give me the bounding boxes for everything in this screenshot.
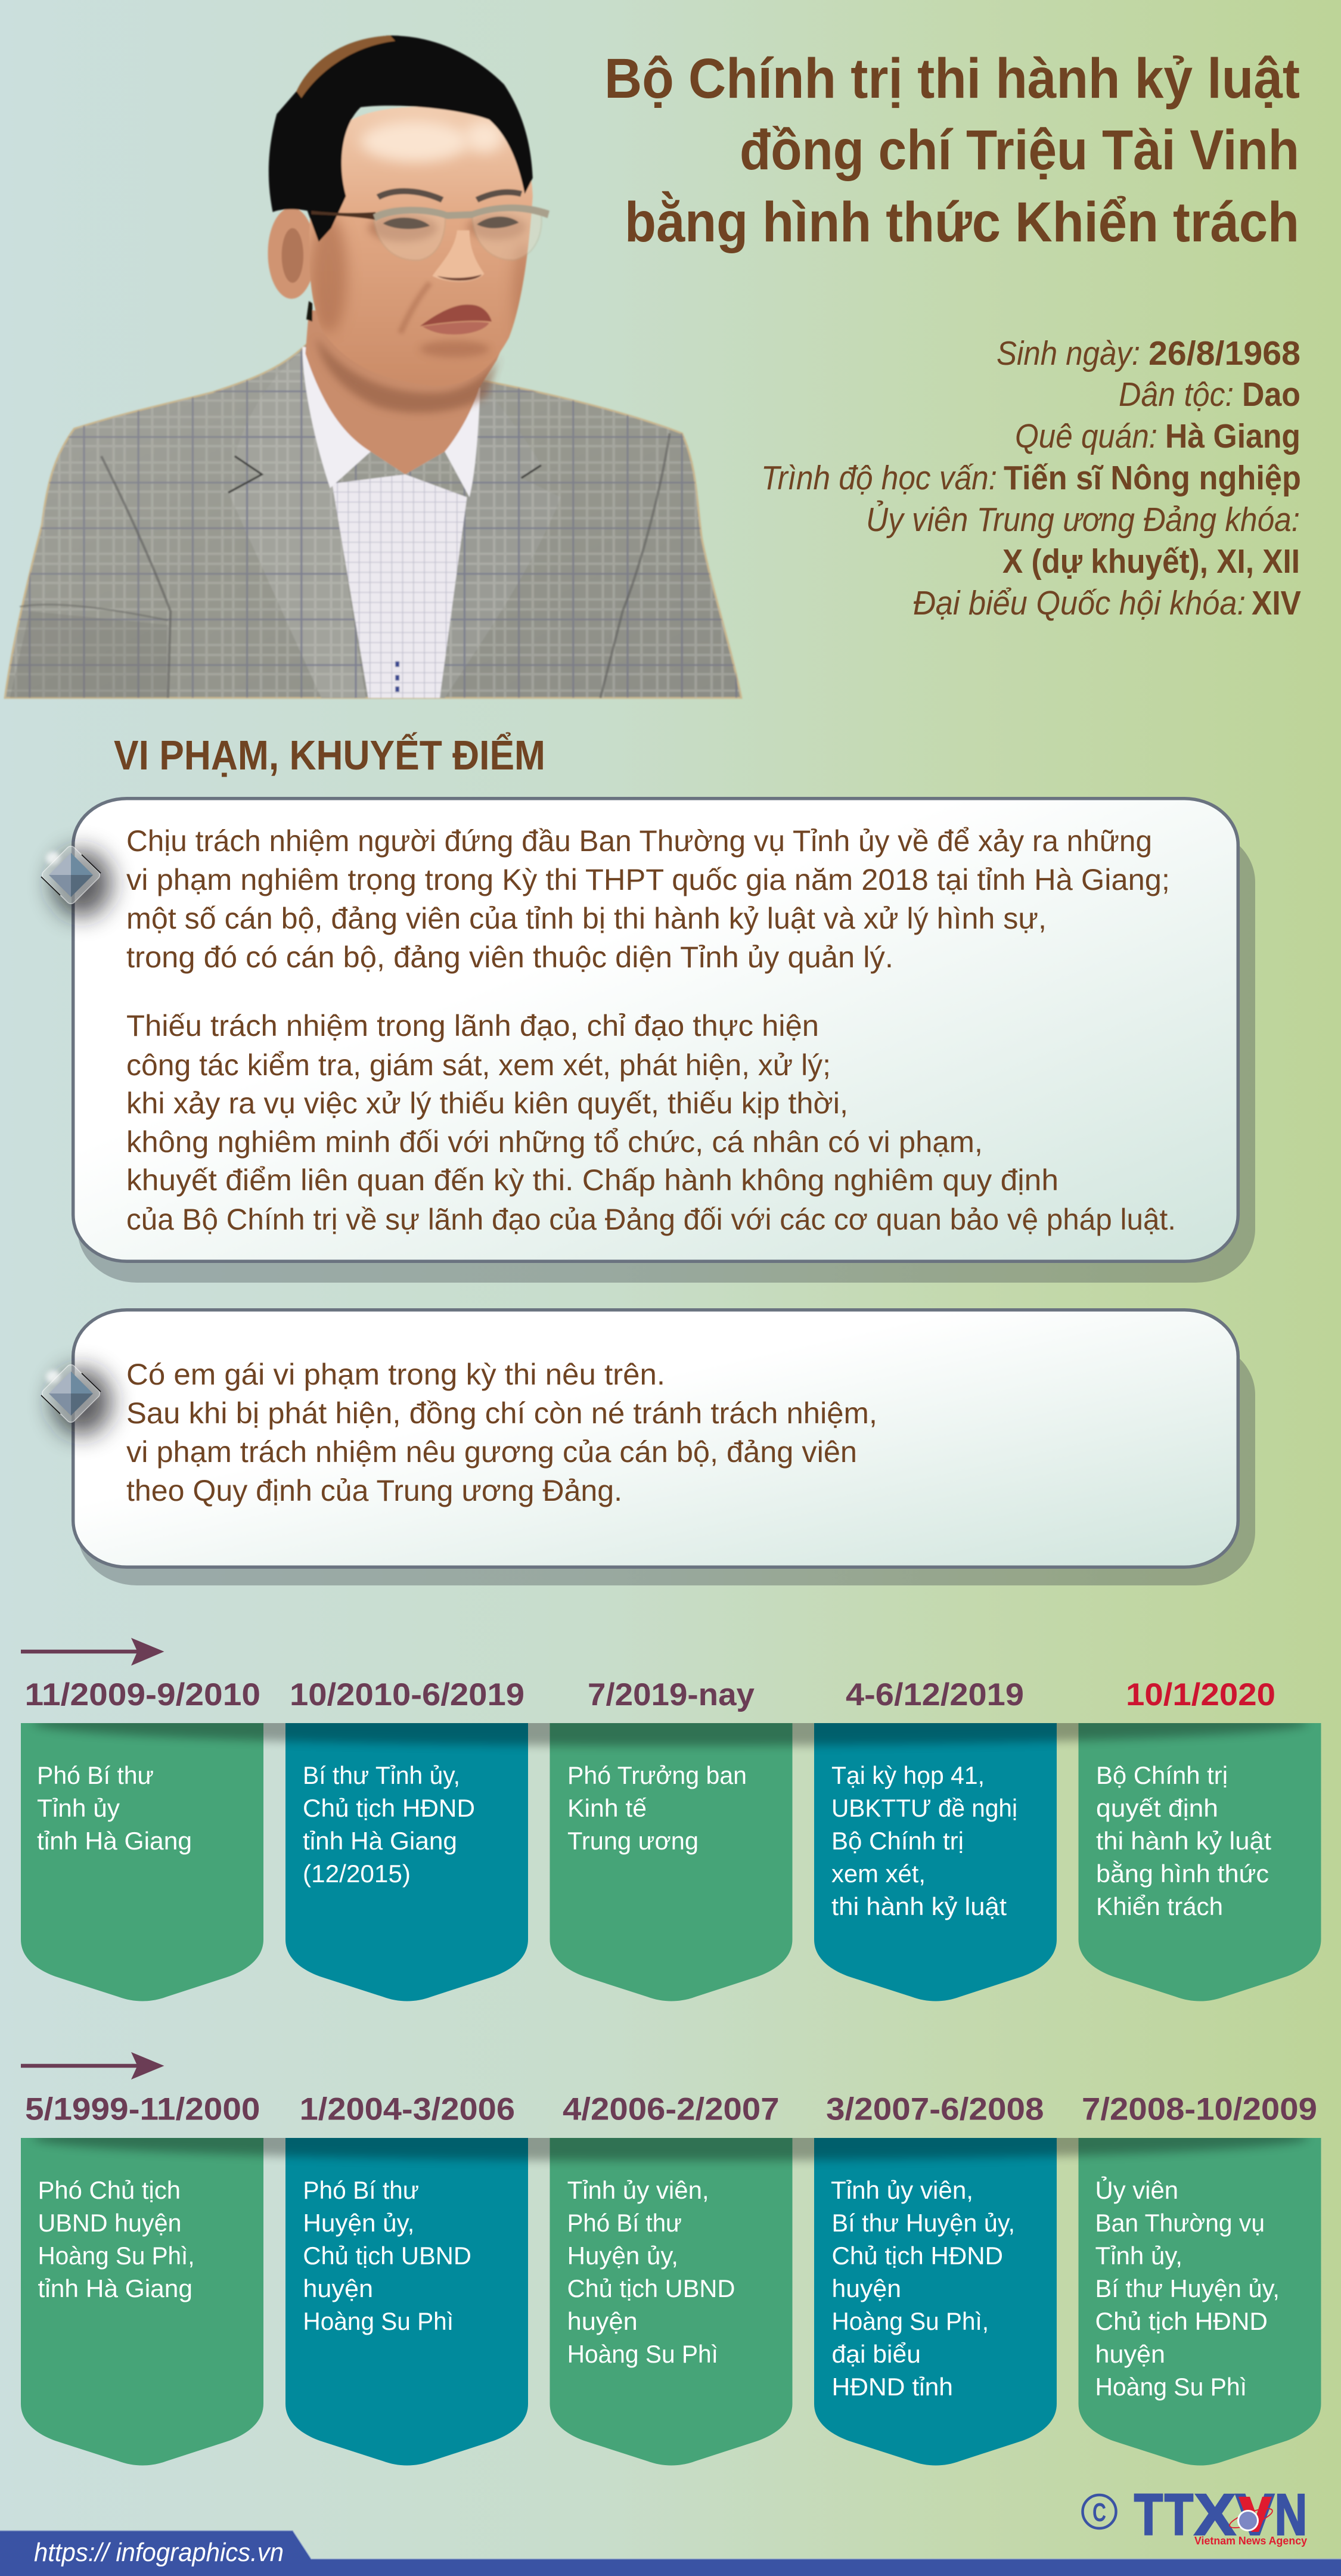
card: Phó Trưởng ban: Phó Trưởng ban bbox=[567, 1761, 747, 1789]
title: Bộ Chính trị thi hành kỷ luật bbox=[604, 47, 1300, 110]
card: kỳ họp 41: Tại kỳ họp 41, bbox=[831, 1761, 985, 1789]
card: Phó Trưởng ban bbox=[550, 1723, 793, 2001]
panel: violations card 1: trong đó có cán bộ, đảng viên thuộc diện Tỉnh ủy quản lý. bbox=[126, 941, 893, 974]
footer bar: https:// infographics.vn bbox=[34, 2538, 284, 2567]
card: Bí thư Tỉnh ủy bbox=[285, 1723, 528, 2001]
panel: violations card 1: Chịu trách nhiệm người đứng đầu Ban Thường vụ Tỉnh ủy về để xảy ra những bbox=[126, 824, 1152, 858]
card: Phó Bí thư Huyện ủy: Chủ tịch UBND bbox=[303, 2242, 471, 2270]
biography details: Dân tộc: bbox=[1119, 375, 1234, 414]
card: quyết định Khiển trách: quyết định bbox=[1096, 1794, 1218, 1822]
biography details: 26/8/1968 bbox=[1148, 334, 1300, 373]
card: quyết định Khiển trách: thi hành kỷ luật bbox=[1096, 1827, 1271, 1855]
card: Ủy viên Ban Thường vụ: Ban Thường vụ bbox=[1095, 2209, 1265, 2237]
card: Ủy viên Ban Thường vụ: Tỉnh ủy, bbox=[1095, 2242, 1182, 2270]
card: Phó Bí thư Huyện ủy: Hoàng Su Phì bbox=[303, 2307, 454, 2335]
biography details: Trình độ học vấn: bbox=[761, 459, 997, 497]
portrait photo bbox=[5, 36, 741, 698]
panel: violations card 2: Sau khi bị phát hiện, đồng chí còn né tránh trách nhiệm, bbox=[126, 1396, 877, 1430]
icon: diamond bullet 1 bbox=[40, 844, 111, 917]
glasses bbox=[373, 206, 542, 260]
logo: copyright TTXVN: N bbox=[1275, 2482, 1307, 2547]
card: kỳ họp 41: UBKTTƯ đề nghị bbox=[831, 1794, 1017, 1822]
card: kỳ họp 41: Bộ Chính trị bbox=[831, 1827, 964, 1855]
card: Tỉnh ủy viên, Phó Bí thư: Tỉnh ủy viên, bbox=[567, 2176, 709, 2204]
biography details: Tiến sĩ Nông nghiệp bbox=[1004, 459, 1301, 497]
panel: violations card 1: Thiếu trách nhiệm trong lãnh đạo, chỉ đạo thực hiện bbox=[126, 1009, 819, 1042]
card: quyết định Khiển trách: Khiển trách bbox=[1096, 1892, 1223, 1920]
panel: violations card 1: không nghiêm minh đối với những tổ chức, cá nhân có vi phạm, bbox=[126, 1125, 983, 1159]
card: Phó Chủ tịch UBND: Phó Chủ tịch bbox=[38, 2176, 181, 2204]
card: Tỉnh ủy viên, Bí thư Huyện ủy: Hoàng Su Phì, bbox=[832, 2307, 989, 2335]
timeline date 5/1999-11/2000: 5/1999-11/2000 bbox=[25, 2092, 260, 2127]
brows and eyes bbox=[378, 191, 522, 200]
card: Phó Bí thư Tỉnh ủy bbox=[21, 1723, 263, 2001]
card: Tỉnh ủy viên, Bí thư Huyện ủy: Tỉnh ủy viên, bbox=[831, 2176, 973, 2204]
card: Ủy viên Ban Thường vụ: huyện bbox=[1095, 2340, 1165, 2368]
timeline date 11/2009-9/2010: 11/2009-9/2010 bbox=[25, 1677, 260, 1712]
logo: copyright TTXVN: C bbox=[1092, 2498, 1106, 2527]
card: Ủy viên Ban Thường vụ: Hoàng Su Phì bbox=[1095, 2373, 1247, 2401]
card: Phó Chủ tịch UBND: tỉnh Hà Giang bbox=[38, 2274, 193, 2302]
card: Phó Bí thư Tỉnh ủy: tỉnh Hà Giang bbox=[37, 1827, 192, 1855]
card: Phó Chủ tịch UBND: Hoàng Su Phì, bbox=[38, 2242, 194, 2270]
biography details: Ủy viên Trung ương Đảng khóa: bbox=[866, 499, 1300, 539]
card: Tỉnh ủy viên, Phó Bí thư: Phó Bí thư bbox=[567, 2209, 682, 2237]
card: Tỉnh ủy viên, Phó Bí thư: huyện bbox=[567, 2307, 638, 2335]
card: Tỉnh ủy viên, Phó Bí thư: Chủ tịch UBND bbox=[567, 2274, 735, 2302]
timeline date 1/2004-3/2006: 1/2004-3/2006 bbox=[300, 2092, 515, 2127]
timeline date 4/2006-2/2007: 4/2006-2/2007 bbox=[563, 2092, 780, 2127]
timeline date 7/2008-10/2009: 7/2008-10/2009 bbox=[1082, 2092, 1317, 2127]
card: Bí thư Tỉnh ủy: tỉnh Hà Giang bbox=[303, 1827, 457, 1855]
panel: violations card 2: vi phạm trách nhiệm nêu gương của cán bộ, đảng viên bbox=[126, 1435, 857, 1469]
logo: copyright TTXVN bbox=[1082, 2482, 1307, 2547]
card: Tỉnh ủy viên, Bí thư Huyện ủy bbox=[814, 2138, 1057, 2465]
card: Bí thư Tỉnh ủy: (12/2015) bbox=[303, 1860, 411, 1888]
card: Ủy viên Ban Thường vụ: Chủ tịch HĐND bbox=[1095, 2307, 1268, 2335]
panel: violations card 1: vi phạm nghiêm trọng trong Kỳ thi THPT quốc gia năm 2018 tại tỉnh Hà Giang; bbox=[126, 863, 1170, 896]
biography details: X (dự khuyết), XI, XII bbox=[1002, 542, 1300, 581]
logo: copyright TTXVN: X bbox=[1194, 2482, 1236, 2547]
panel: violations card 1: công tác kiểm tra, giám sát, xem xét, phát hiện, xử lý; bbox=[126, 1048, 831, 1082]
card: Tỉnh ủy viên, Bí thư Huyện ủy: HĐND tỉnh bbox=[832, 2373, 953, 2401]
card: Tỉnh ủy viên, Bí thư Huyện ủy: Chủ tịch HĐND bbox=[832, 2242, 1003, 2270]
card: Tỉnh ủy viên, Phó Bí thư: Huyện ủy, bbox=[567, 2242, 678, 2270]
panel: violations card 1: của Bộ Chính trị về sự lãnh đạo của Đảng đối với các cơ quan bảo vệ pháp luật. bbox=[126, 1203, 1176, 1236]
card: kỳ họp 41: xem xét, bbox=[831, 1860, 926, 1888]
heading: violations: VI PHẠM, KHUYẾT ĐIỂM bbox=[114, 731, 545, 778]
panel: violations card 2: Có em gái vi phạm trong kỳ thi nêu trên. bbox=[126, 1358, 665, 1391]
card: Phó Bí thư Tỉnh ủy: Phó Bí thư bbox=[37, 1761, 154, 1789]
logo: copyright TTXVN: Vietnam News Agency bbox=[1194, 2535, 1307, 2547]
card: Ủy viên Ban Thường vụ bbox=[1079, 2138, 1321, 2465]
timeline date 10/2010-6/2019: 10/2010-6/2019 bbox=[290, 1677, 524, 1712]
card: Phó Bí thư Huyện ủy: Huyện ủy, bbox=[303, 2209, 414, 2237]
card: Tỉnh ủy viên, Bí thư Huyện ủy: huyện bbox=[832, 2274, 901, 2302]
card: Tỉnh ủy viên, Phó Bí thư bbox=[550, 2138, 793, 2465]
card: Phó Bí thư Huyện ủy: huyện bbox=[303, 2274, 373, 2302]
timeline date 4-6/12/2019: 4-6/12/2019 bbox=[846, 1677, 1024, 1712]
card: Phó Bí thư Huyện ủy: Phó Bí thư bbox=[303, 2176, 419, 2204]
card: Phó Trưởng ban: Kinh tế bbox=[567, 1794, 647, 1822]
card: Bí thư Tỉnh ủy: Bí thư Tỉnh ủy, bbox=[303, 1761, 460, 1789]
footer bar bbox=[0, 2531, 1341, 2576]
logo: copyright TTXVN: V bbox=[1236, 2482, 1274, 2547]
card: Phó Chủ tịch UBND: UBND huyện bbox=[38, 2209, 181, 2237]
logo: copyright TTXVN: T bbox=[1134, 2482, 1163, 2547]
biography details bbox=[761, 334, 1301, 622]
mouth bbox=[420, 305, 492, 326]
arrow: timeline row 1 bbox=[21, 1638, 164, 1666]
nose bbox=[432, 230, 485, 282]
arrow: timeline row 2 bbox=[21, 2052, 164, 2080]
icon: diamond bullet 2 bbox=[40, 1363, 111, 1435]
panel: violations card 2 bbox=[73, 1310, 1255, 1585]
card: kỳ họp 41 bbox=[814, 1723, 1057, 2001]
card: Tỉnh ủy viên, Bí thư Huyện ủy: Bí thư Huyện ủy, bbox=[832, 2209, 1015, 2237]
card: quyết định Khiển trách bbox=[1079, 1723, 1321, 2001]
card: Bí thư Tỉnh ủy: Chủ tịch HĐND bbox=[303, 1794, 475, 1822]
card: Ủy viên Ban Thường vụ: Ủy viên bbox=[1095, 2175, 1178, 2204]
biography details: Quê quán: bbox=[1015, 417, 1157, 455]
card: Phó Bí thư Huyện ủy bbox=[285, 2138, 528, 2465]
panel: violations card 1: khuyết điểm liên quan đến kỳ thi. Chấp hành không nghiêm quy định bbox=[126, 1163, 1058, 1197]
title bbox=[604, 47, 1300, 254]
panel: violations card 1: khi xảy ra vụ việc xử lý thiếu kiên quyết, thiếu kịp thời, bbox=[126, 1087, 848, 1120]
card: Phó Bí thư Tỉnh ủy: Tỉnh ủy bbox=[37, 1794, 120, 1822]
hair bbox=[269, 36, 533, 242]
biography details: XIV bbox=[1252, 584, 1301, 622]
panel: violations card 1 bbox=[73, 799, 1255, 1283]
timeline date 10/1/2020: 10/1/2020 bbox=[1126, 1677, 1275, 1712]
panel: violations card 1: một số cán bộ, đảng viên của tỉnh bị thi hành kỷ luật và xử lý hình sự, bbox=[126, 902, 1047, 935]
biography details: Sinh ngày: bbox=[997, 334, 1140, 373]
card: Ủy viên Ban Thường vụ: Bí thư Huyện ủy, bbox=[1095, 2274, 1280, 2302]
logo: copyright TTXVN: T bbox=[1165, 2482, 1193, 2547]
card: quyết định Khiển trách: Bộ Chính trị bbox=[1096, 1761, 1228, 1789]
biography details: Hà Giang bbox=[1165, 417, 1300, 455]
card: quyết định Khiển trách: bằng hình thức bbox=[1096, 1860, 1269, 1888]
card: Tỉnh ủy viên, Bí thư Huyện ủy: đại biểu bbox=[832, 2340, 921, 2368]
biography details: Đại biểu Quốc hội khóa: bbox=[913, 584, 1246, 622]
card: kỳ họp 41: thi hành kỷ luật bbox=[831, 1892, 1007, 1920]
card: Phó Trưởng ban: Trung ương bbox=[567, 1827, 699, 1855]
timeline date 7/2019-nay: 7/2019-nay bbox=[588, 1677, 755, 1712]
card: Tỉnh ủy viên, Phó Bí thư: Hoàng Su Phì bbox=[567, 2340, 718, 2368]
biography details: Dao bbox=[1242, 375, 1300, 414]
timeline date 3/2007-6/2008: 3/2007-6/2008 bbox=[826, 2092, 1044, 2127]
card: Phó Chủ tịch UBND bbox=[21, 2138, 263, 2465]
panel: violations card 2: theo Quy định của Trung ương Đảng. bbox=[126, 1474, 622, 1507]
